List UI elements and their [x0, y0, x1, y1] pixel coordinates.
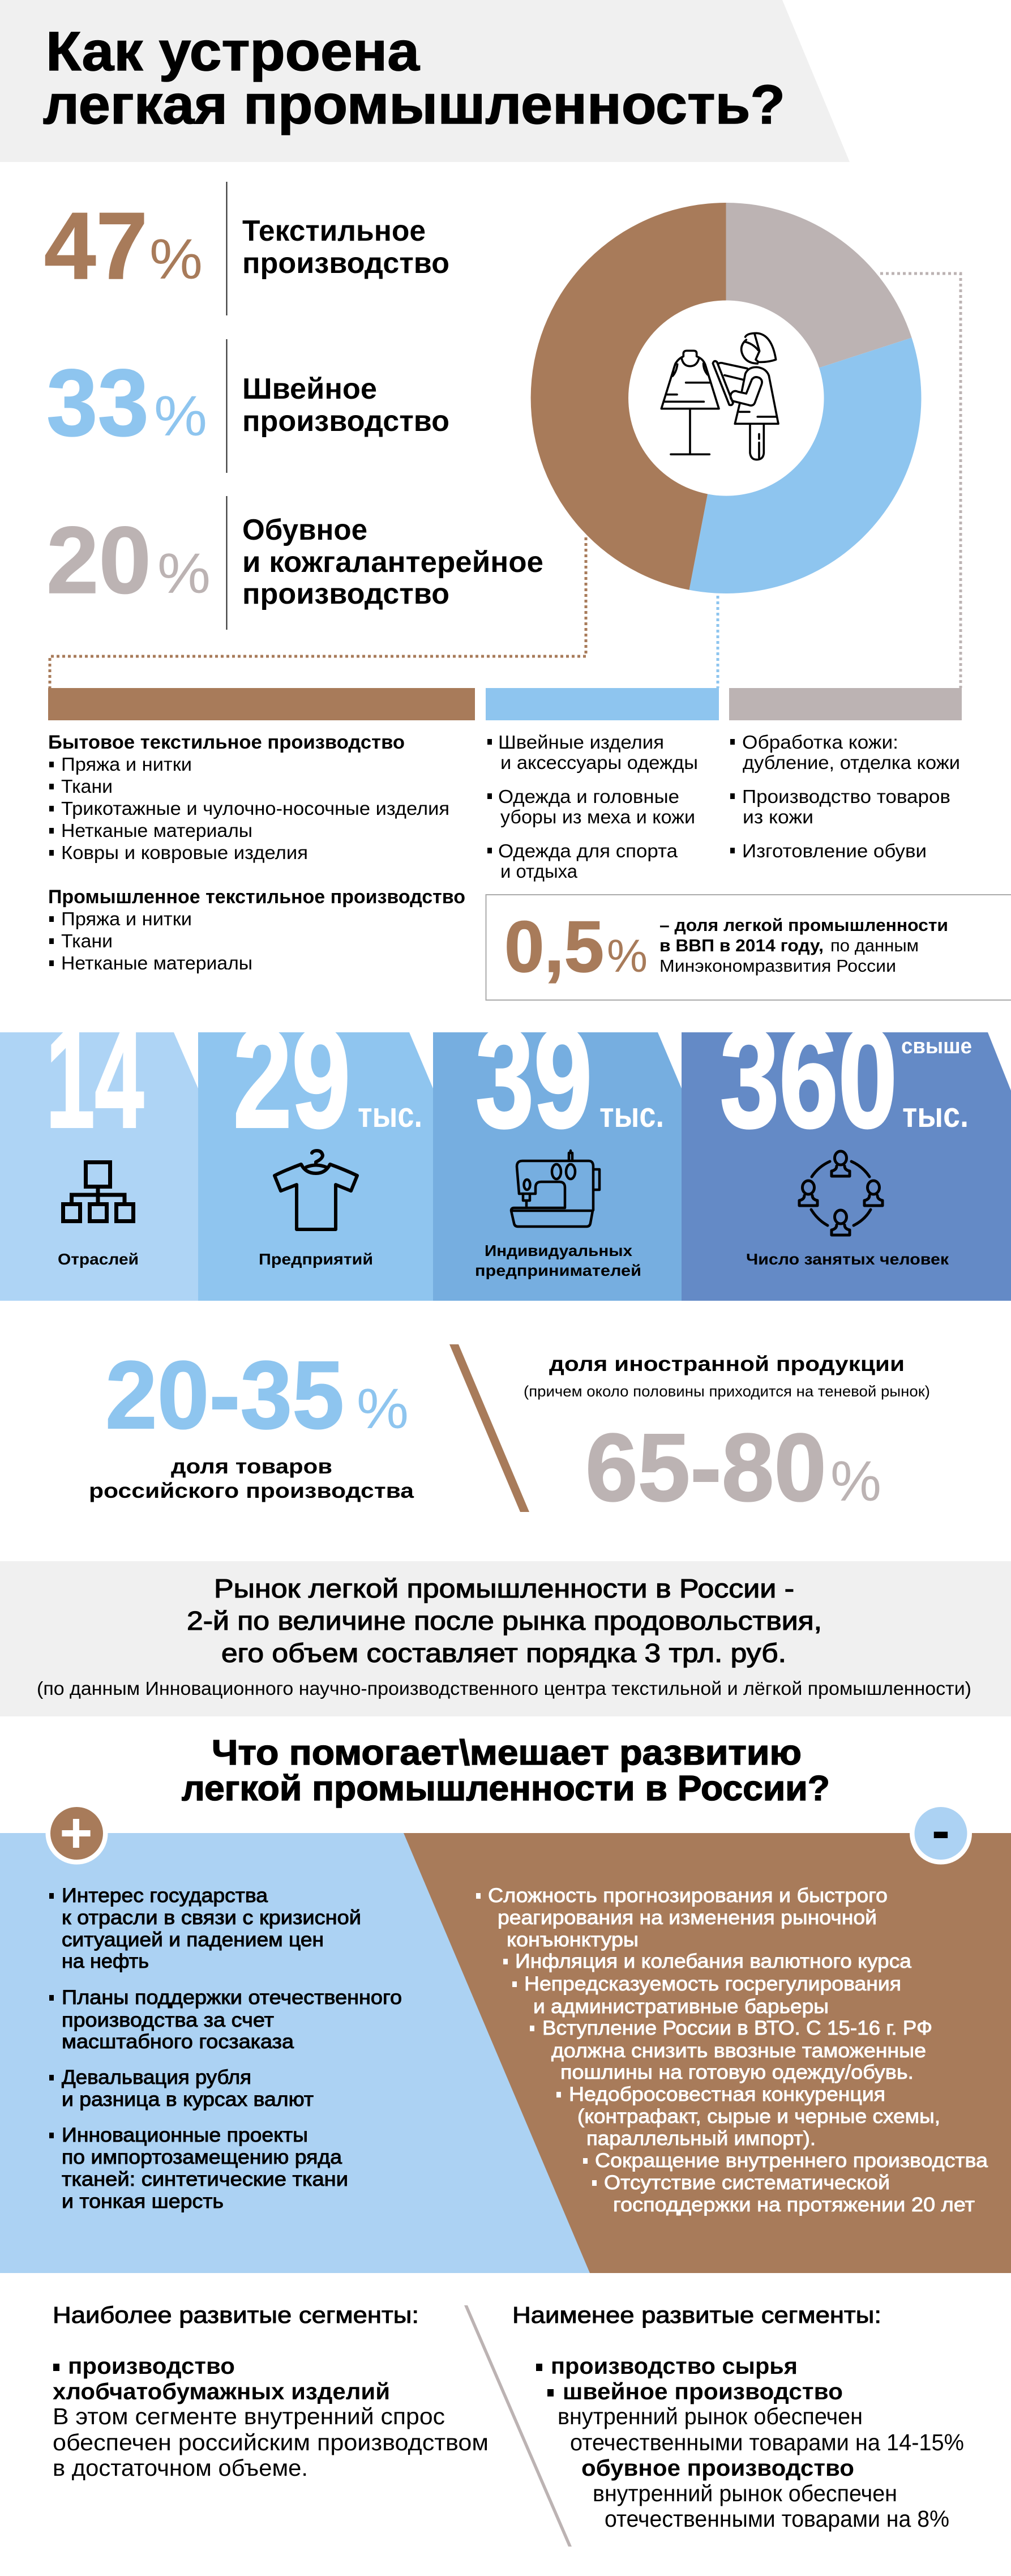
stat: 47% textile: 47	[44, 193, 148, 299]
donut chart	[531, 203, 921, 593]
panel: positive factors: и разница в курсах валют	[62, 2088, 314, 2111]
title banner	[0, 0, 850, 162]
list: textile production: Пряжа и нитки	[61, 908, 192, 929]
callout: 0.5% of GDP	[486, 895, 1011, 1000]
panel: enterprises count: 29	[233, 999, 350, 1157]
panel: individual entrepreneurs count: 39	[475, 999, 592, 1157]
segments: least developed: Наименее развитые сегменты:	[512, 2302, 881, 2328]
list: textile production: Ткани	[61, 776, 113, 797]
segments: most developed: производство	[68, 2353, 235, 2379]
list: textile production: Промышленное текстильное производство	[48, 886, 465, 908]
segments: least developed: обувное производство	[581, 2455, 854, 2481]
panel: negative factors: Сокращение внутреннего производства	[595, 2150, 988, 2172]
segments: most developed: Наиболее развитые сегменты:	[53, 2302, 419, 2328]
panel: negative factors	[404, 1833, 1011, 2273]
icon: hierarchy	[63, 1162, 134, 1221]
panel: negative factors: пошлины на готовую одежду/обувь.	[560, 2061, 914, 2083]
panel: positive factors: Интерес государства	[62, 1885, 268, 1907]
panel: enterprises count: тыс.	[358, 1096, 422, 1135]
panel: negative factors: Недобросовестная конкуренция	[569, 2083, 885, 2105]
stat: domestic goods share: доля товаров	[171, 1455, 332, 1478]
panel: negative factors: господдержки на протяжении 20 лет	[613, 2194, 975, 2216]
title banner: легкая промышленность?	[43, 74, 785, 135]
list: sewing production: Одежда и головные	[498, 786, 679, 807]
panel: negative factors: Отсутствие систематической	[604, 2172, 890, 2194]
panel: negative factors: (контрафакт, сырые и черные схемы,	[577, 2105, 940, 2128]
panel: positive factors: ситуацией и падением цен	[62, 1929, 324, 1951]
panel: employed people count: тыс.	[902, 1096, 969, 1135]
panel: negative factors: реагирования на изменения рыночной	[498, 1907, 877, 1929]
heading: helps and hinders: легкой промышленности в России?	[182, 1769, 830, 1808]
icon: sewing machine	[511, 1151, 599, 1227]
title banner: Как устроена	[46, 20, 420, 82]
list: leather production: Обработка кожи:	[742, 732, 898, 753]
segments: least developed: швейное производство	[563, 2378, 843, 2404]
icon: people network	[799, 1151, 883, 1235]
panel: negative factors: и административные барьеры	[533, 1996, 829, 2018]
panel: negative factors: Инфляция и колебания валютного курса	[515, 1950, 912, 1972]
list: textile production: Ковры и ковровые изделия	[61, 842, 308, 863]
panel: positive factors: на нефть	[62, 1950, 149, 1972]
panel: individual entrepreneurs count: Индивидуальных	[485, 1242, 632, 1259]
stat: 47% textile: производство	[242, 247, 449, 280]
panel: industries count: 14	[46, 999, 144, 1157]
panel: employed people count	[682, 999, 1011, 1301]
callout: 0.5% of GDP: – доля легкой промышленности	[659, 915, 948, 935]
panel: employed people count: свыше	[901, 1035, 972, 1058]
list: sewing production: Швейные изделия	[498, 732, 664, 753]
badge: minus: -	[932, 1800, 950, 1861]
segments: least developed: отечественными товарами на 14-15%	[570, 2429, 964, 2455]
callout: 0.5% of GDP: в ВВП в 2014 году,	[659, 935, 824, 955]
panel: industries count: Отраслей	[58, 1250, 139, 1268]
panel: employed people count: Число занятых человек	[746, 1250, 949, 1268]
divider slash	[449, 1344, 529, 1512]
stat: 20% footwear and leather	[46, 496, 543, 630]
list: textile production	[48, 732, 465, 973]
heading: helps and hinders	[182, 1733, 830, 1808]
list: textile production: Ткани	[61, 930, 113, 951]
badge: plus	[45, 1801, 108, 1865]
segments: most developed	[53, 2302, 489, 2481]
panel: market size: (по данным Инновационного научно-производственного центра текстильной и лёгкой промышленности)	[37, 1678, 971, 1699]
stat: 47% textile: %	[149, 228, 203, 291]
segments: least developed: производство сырья	[551, 2353, 798, 2379]
callout: 0.5% of GDP: 0,5	[504, 907, 604, 988]
stat: 20% footwear and leather: и кожгалантерейное	[242, 546, 543, 579]
callout: 0.5% of GDP: Минэкономразвития России	[659, 956, 896, 976]
badge: plus: +	[59, 1801, 93, 1865]
list: sewing production: уборы из меха и кожи	[500, 806, 695, 827]
segments: most developed: в достаточном объеме.	[53, 2455, 308, 2481]
stat: 33% sewing: 33	[46, 349, 149, 456]
panel: individual entrepreneurs count: предпринимателей	[475, 1262, 641, 1279]
list: sewing production: и отдыха	[500, 861, 578, 882]
panel: negative factors: конъюнктуры	[507, 1929, 639, 1951]
panel: positive factors: масштабного госзаказа	[62, 2031, 294, 2053]
list: sewing production	[487, 732, 698, 882]
stat: 47% textile: Текстильное	[242, 215, 426, 247]
segments: least developed: внутренний рынок обеспечен	[593, 2480, 897, 2506]
callout: 0.5% of GDP: %	[607, 930, 648, 982]
dotted connectors	[50, 274, 961, 688]
stat: 20% footwear and leather: %	[157, 542, 211, 605]
segments: most developed: обеспечен российским производством	[53, 2429, 489, 2455]
list: textile production: Пряжа и нитки	[61, 754, 192, 775]
panel: positive factors: производства за счет	[62, 2009, 274, 2031]
segments: least developed	[512, 2302, 964, 2532]
panel: positive factors: тканей: синтетические ткани	[62, 2168, 348, 2190]
stat: 33% sewing: %	[154, 385, 207, 448]
badge: minus	[910, 1800, 972, 1864]
segments: most developed: В этом сегменте внутренний спрос	[53, 2403, 445, 2429]
stat: foreign goods share: 65-80	[585, 1414, 826, 1522]
list: textile production: Трикотажные и чулочно-носочные изделия	[61, 798, 449, 819]
heading: helps and hinders: Что помогает\мешает развитию	[212, 1733, 802, 1772]
panel: positive factors: Инновационные проекты	[62, 2124, 308, 2146]
stat: 20% footwear and leather: 20	[46, 507, 151, 613]
icon: t-shirt on hanger	[275, 1151, 357, 1229]
stat: 20% footwear and leather: Обувное	[242, 514, 367, 546]
divider line	[464, 2305, 572, 2547]
panel: individual entrepreneurs count: тыс.	[599, 1096, 664, 1135]
panel: enterprises count: Предприятий	[259, 1250, 373, 1268]
list: leather production: Производство товаров	[742, 786, 950, 807]
callout: 0.5% of GDP: по данным	[830, 935, 919, 955]
stat: foreign goods share: доля иностранной продукции	[549, 1352, 905, 1375]
list: leather production: из кожи	[743, 806, 813, 827]
stat: 47% textile	[44, 182, 449, 315]
panel: negative factors: Непредсказуемость госрегулирования	[524, 1973, 901, 1995]
panel: market size	[0, 1561, 1011, 1716]
panel: positive factors: и тонкая шерсть	[62, 2190, 224, 2212]
list: textile production: Нетканые материалы	[61, 820, 252, 841]
panel: negative factors: Сложность прогнозирования и быстрого	[488, 1885, 888, 1907]
panel: positive factors: Планы поддержки отечественного	[62, 1987, 402, 2009]
panel: industries count	[0, 999, 198, 1301]
panel: positive factors: Девальвация рубля	[62, 2066, 251, 2088]
panel: negative factors: параллельный импорт).	[586, 2128, 816, 2150]
list: textile production: Нетканые материалы	[61, 952, 252, 973]
category color bars	[48, 688, 962, 720]
panel: individual entrepreneurs count	[433, 999, 682, 1301]
stat: foreign goods share: %	[830, 1450, 881, 1513]
stat: foreign goods share	[524, 1352, 930, 1522]
list: leather production	[730, 732, 960, 861]
list: textile production: Бытовое текстильное производство	[48, 732, 405, 753]
panel: employed people count: 360	[720, 999, 897, 1157]
panel: negative factors: должна снизить ввозные таможенные	[551, 2040, 926, 2062]
panel: positive factors: к отрасли в связи с кризисной	[62, 1907, 361, 1929]
panel: market size: 2-й по величине после рынка продовольствия,	[187, 1606, 822, 1635]
segments: least developed: внутренний рынок обеспечен	[558, 2403, 863, 2429]
stat: 33% sewing	[46, 339, 449, 473]
panel: enterprises count	[198, 999, 433, 1301]
segments: most developed: хлобчатобумажных изделий	[53, 2378, 390, 2404]
list: leather production: дубление, отделка кожи	[743, 752, 960, 773]
list: sewing production: и аксессуары одежды	[500, 752, 698, 773]
segments: least developed: отечественными товарами на 8%	[605, 2506, 949, 2532]
panel: positive factors	[0, 1833, 1011, 2273]
stat: 33% sewing: производство	[242, 405, 449, 438]
stat: 20% footwear and leather: производство	[242, 578, 449, 610]
panel: positive factors: по импортозамещению ряда	[62, 2146, 342, 2168]
stat: 33% sewing: Швейное	[242, 373, 377, 405]
panel: market size: его объем составляет порядка 3 трл. руб.	[221, 1638, 786, 1668]
list: leather production: Изготовление обуви	[742, 840, 927, 861]
stat: foreign goods share: (причем около половины приходится на теневой рынок)	[524, 1383, 930, 1400]
stat: domestic goods share	[89, 1342, 414, 1502]
icon: seamstress and mannequin	[661, 333, 778, 460]
panel: negative factors: Вступление России в ВТО. С 15-16 г. РФ	[542, 2017, 932, 2039]
stat: domestic goods share: 20-35	[105, 1342, 344, 1449]
stat: domestic goods share: российского производства	[89, 1479, 414, 1502]
list: sewing production: Одежда для спорта	[498, 840, 678, 861]
stat: domestic goods share: %	[357, 1377, 409, 1441]
panel: market size: Рынок легкой промышленности в России -	[214, 1574, 794, 1603]
